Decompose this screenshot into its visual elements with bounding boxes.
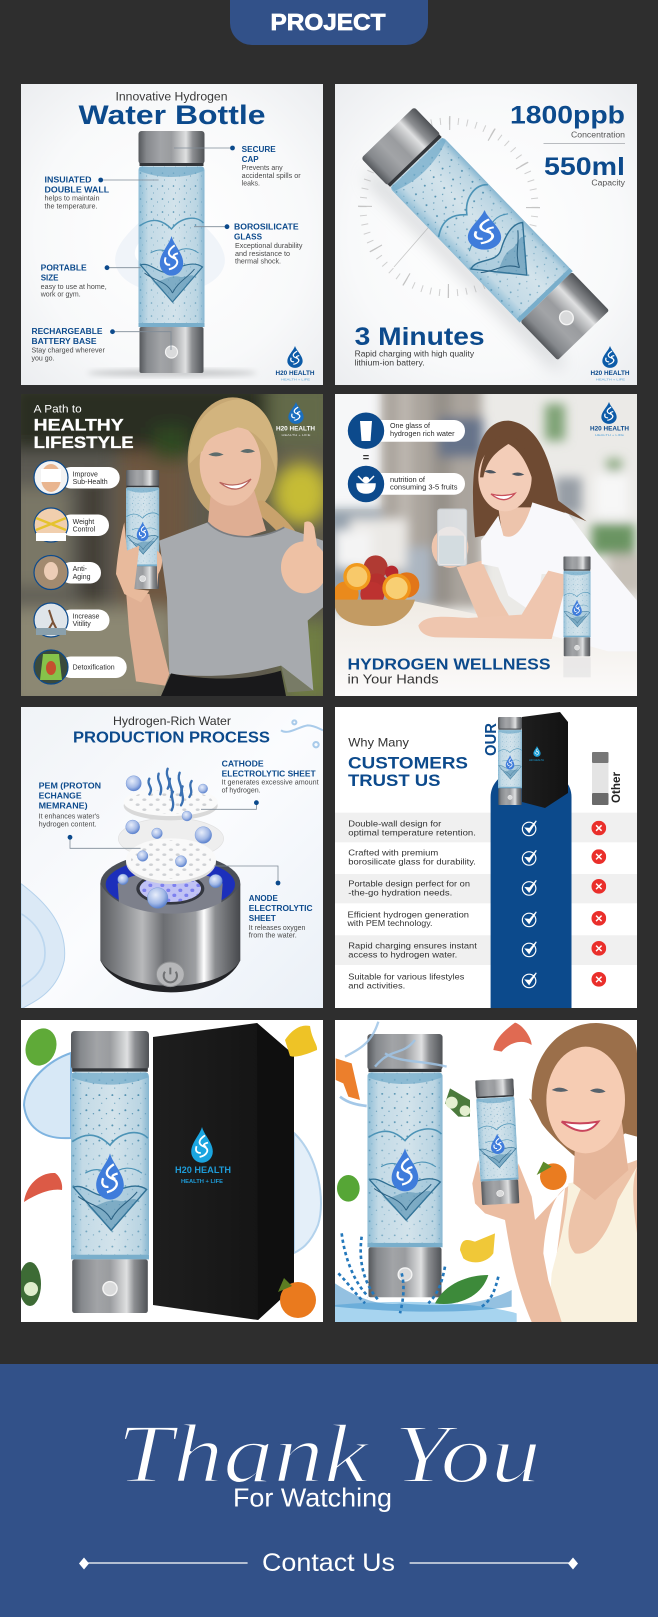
callout: portable size: easy to use at home,: [41, 284, 107, 291]
steel body: [100, 884, 240, 986]
callout: PEM: hydrogen content.: [39, 822, 97, 829]
benefit: anti-aging: Aging: [73, 574, 91, 581]
table: [335, 601, 637, 696]
benefit: improve sub-health: [34, 460, 120, 494]
banana: [285, 1026, 317, 1057]
specs: 3 minutes: 3 Minutes: [355, 323, 485, 351]
logo: H20 Health white: [276, 402, 315, 437]
pumpkin: [278, 1278, 316, 1318]
hand on bottle: [116, 522, 149, 602]
callout: borosilicate glass: [194, 222, 303, 266]
product bottle in hand: [126, 470, 159, 589]
infographic pill: fruits: nutrition of: [390, 477, 425, 484]
header tab: PROJECT: [230, 0, 428, 45]
t-shirt: [159, 522, 323, 691]
callout: portable size: [40, 264, 141, 299]
title: A Path to: [34, 404, 82, 416]
title: Innovative Hydrogen: [116, 92, 228, 104]
panel: bottle and box: [19, 1020, 323, 1322]
our product and box: [498, 712, 568, 808]
our product and box: H20 HEALTH: [529, 758, 544, 762]
blue highlight column: [491, 772, 572, 1008]
lettuce: [337, 1175, 360, 1202]
row 3: Portable design perfect for on: [348, 879, 470, 889]
apple slice: [24, 1173, 62, 1202]
callout: cathode electrolytic sheet: It generates excessive amount: [222, 780, 319, 787]
callout: PEM: [39, 781, 141, 848]
heading: in Your Hands: [348, 671, 439, 686]
title: [78, 92, 264, 124]
water splash left: [21, 884, 65, 1009]
logo: H20 Health: H20 HEALTH: [590, 370, 630, 377]
logo: H20 Health: H20 HEALTH: [276, 370, 315, 377]
heading: HYDROGEN WELLNESS: [348, 656, 550, 673]
row 1: optimal temperature retention.: [348, 828, 476, 838]
heading: TRUST US: [348, 771, 440, 790]
callout: PEM: It enhances water's: [39, 814, 100, 821]
tank top: [548, 1167, 637, 1322]
specs: 3 minutes: [355, 327, 484, 367]
callout: rechargeable battery base: [32, 327, 171, 363]
contact us: Contact Us: [262, 1549, 395, 1577]
other bottle: [592, 752, 608, 805]
benefit: anti-aging: [34, 556, 101, 590]
label: OUR: OUR: [483, 723, 500, 756]
arm: [472, 1160, 565, 1322]
callout: insulated double wall: the temperature.: [44, 203, 98, 210]
raised arm: [457, 561, 510, 618]
photo composition: [335, 1022, 637, 1322]
water splash left: [24, 1053, 71, 1138]
callout: rechargeable battery base: RECHARGEABLE: [32, 327, 103, 336]
callout: borosilicate glass: GLASS: [234, 232, 263, 242]
glass: [438, 509, 467, 566]
logo: H20 Health white: HEALTH + LIFE: [282, 433, 310, 437]
label: Other: Other: [611, 771, 623, 803]
callout: insulated double wall: INSUlATED: [44, 176, 92, 185]
specs: 1800ppb concentration: [510, 101, 625, 144]
infographic pill: one glass: hydrogen rich water: [390, 431, 455, 438]
large product bottle: [367, 1034, 443, 1297]
rotated product bottle: [361, 107, 610, 361]
infographic pill: fruits: consuming 3-5 fruits: [390, 484, 458, 492]
device exploded view: [21, 720, 323, 1009]
row 3: [348, 879, 606, 898]
row 4: [346, 909, 606, 928]
callout: cathode electrolytic sheet: [201, 759, 319, 809]
panel: customer trust comparison: [335, 707, 637, 1008]
callout: secure cap: leaks.: [242, 180, 260, 188]
heading: Why Many: [348, 736, 409, 750]
specs: 1800ppb concentration: 1800ppb: [510, 101, 625, 129]
neck: [573, 1120, 628, 1200]
row 6: Suitable for various lifestyles: [348, 972, 464, 982]
rim and glow: [100, 853, 240, 914]
callout: rechargeable battery base: you go.: [32, 356, 55, 363]
callout: PEM: MEMRANE): [39, 801, 88, 810]
header tab: PROJECT: PROJECT: [270, 9, 386, 35]
hydrogen squiggles: [149, 769, 192, 810]
fruit bowl: [333, 555, 419, 626]
face: [200, 422, 261, 506]
photo: woman holding bottle: [21, 394, 323, 696]
callout: rechargeable battery base: BATTERY BASE: [32, 337, 97, 346]
apple slice: [493, 1023, 532, 1052]
benefit: detoxification: [34, 650, 127, 684]
splash on cap: [345, 1022, 447, 1067]
title: [34, 404, 134, 452]
specs: 550ml capacity: [544, 157, 625, 187]
banana: [460, 1233, 495, 1262]
callout: portable size: SIZE: [41, 274, 59, 283]
water splash top right: [281, 720, 323, 747]
callout: portable size: work or gym.: [40, 292, 81, 299]
callout: anode electrolytic sheet: It releases oxygen: [249, 925, 306, 932]
row 1: Double-wall design for: [348, 819, 441, 829]
callout: PEM: ECHANGE: [39, 791, 82, 800]
row 1: [348, 819, 606, 838]
callout: borosilicate glass: thermal shock.: [235, 258, 281, 266]
logo: H20 Health white: H20 HEALTH: [276, 426, 315, 433]
callout: anode electrolytic sheet: ELECTROLYTIC: [249, 904, 313, 913]
raised thumb hand: [281, 521, 328, 593]
photo: woman with glass: [335, 394, 637, 696]
for watching: For Watching: [233, 1483, 392, 1513]
callout: anode electrolytic sheet: from the water.: [249, 933, 297, 940]
benefit: anti-aging: Anti-: [73, 566, 88, 573]
row 6: and activities.: [348, 981, 405, 991]
face: [478, 443, 532, 511]
faint background logo: [115, 224, 225, 287]
hydrogen bubbles: [118, 776, 222, 908]
callout: rechargeable battery base: Stay charged wherever: [32, 348, 106, 355]
white shirt: [481, 502, 637, 651]
title: Water Bottle: [78, 100, 266, 130]
contact us: [79, 1549, 578, 1577]
woman body: [548, 1160, 637, 1322]
callout: insulated double wall: DOUBLE WALL: [44, 186, 109, 195]
lettuce: [20, 1024, 62, 1070]
row 2: borosilicate glass for durability.: [348, 856, 476, 866]
benefit: improve sub-health: Sub-Health: [73, 479, 108, 486]
callout: insulated double wall: [44, 176, 159, 210]
gift box: H20 HEALTH: [175, 1165, 231, 1176]
thank you script: Thank You: [117, 1408, 541, 1501]
panel: hydrogen wellness photo: [335, 394, 637, 696]
title: HEALTHY: [34, 416, 124, 435]
product bottle: [71, 1031, 149, 1313]
callout: cathode electrolytic sheet: ELECTROLYTIC SHEET: [222, 769, 316, 778]
logo: H20 Health: [590, 402, 629, 437]
specs: 550ml capacity: Capacity: [591, 179, 625, 188]
callout: secure cap: CAP: [242, 155, 259, 164]
specs: 3 minutes: lithium-ion battery.: [355, 358, 425, 367]
water surface: [335, 1233, 517, 1322]
panel: woman with bottles: [335, 1020, 637, 1322]
panel: healthy lifestyle photo: [21, 394, 323, 696]
footer band: [0, 1364, 658, 1617]
pants: [161, 671, 286, 696]
product bottle: [138, 131, 204, 373]
gift box: [153, 1023, 294, 1320]
callout: anode electrolytic sheet: ANODE: [249, 894, 278, 903]
benefit: increase vitility: Increase: [73, 613, 100, 620]
face: [546, 1047, 625, 1153]
panel: water bottle anatomy: [21, 84, 323, 385]
product bottle: [563, 556, 591, 656]
callout: secure cap: Prevents any: [242, 165, 283, 172]
logo: H20 Health: HEALTH + LIFE: [281, 378, 310, 382]
specs: 1800ppb concentration: Concentration: [571, 130, 625, 140]
heading: CUSTOMERS: [348, 753, 468, 772]
cucumber: [19, 1262, 41, 1306]
hair: [529, 1023, 637, 1165]
row 2: [348, 848, 606, 866]
row 3: -the-go hydration needs.: [348, 888, 452, 898]
benefit: improve sub-health: Improve: [73, 472, 98, 478]
callout: cathode electrolytic sheet: CATHODE: [222, 759, 264, 768]
arm: [126, 591, 169, 686]
title: Hydrogen-Rich Water: [113, 714, 231, 728]
logo: H20 Health: [276, 346, 315, 382]
logo: H20 Health: [590, 346, 630, 382]
callout: anode electrolytic sheet: [214, 866, 313, 940]
callout: cathode electrolytic sheet: of hydrogen.: [222, 787, 261, 794]
small bottle in hand: [475, 1078, 520, 1205]
callout: secure cap: [174, 145, 301, 188]
callout: insulated double wall: helps to maintain: [44, 196, 100, 203]
logo: H20 Health: HEALTH + LIFE: [595, 433, 624, 437]
infographic pill: one glass: One glass of: [390, 423, 430, 430]
callout: PEM: PEM (PROTON: [39, 781, 101, 790]
callout: borosilicate glass: Exceptional durability: [235, 243, 303, 250]
pumpkin: [537, 1162, 567, 1190]
callout: secure cap: accidental spills or: [242, 173, 301, 180]
logo: H20 Health: H20 HEALTH: [590, 426, 629, 432]
bottle logo: [468, 210, 501, 250]
neck: [208, 491, 266, 541]
panel: production process: [21, 707, 323, 1009]
bottle shadow: [87, 370, 257, 376]
row 5: Rapid charging ensures instant: [348, 940, 477, 950]
membrane discs: [118, 818, 224, 859]
specs: 550ml capacity: 550ml: [544, 153, 625, 181]
row 5: [348, 940, 606, 959]
specs: 3 minutes: Rapid charging with high quality: [355, 350, 474, 359]
heading: [348, 656, 550, 686]
water splash right: [294, 1133, 321, 1253]
logo: H20 Health: HEALTH + LIFE: [596, 378, 625, 382]
row bands: [335, 813, 637, 965]
bottle shadow: [370, 175, 560, 365]
callout: secure cap: SECURE: [242, 145, 276, 154]
benefit: increase vitility: Vitility: [73, 621, 91, 628]
hair: [473, 421, 587, 537]
benefit: weight control: Weight: [73, 519, 94, 526]
benefit: weight control: [34, 508, 109, 542]
row 2: Crafted with premium: [348, 848, 438, 858]
heading: [348, 736, 468, 790]
gift box: HEALTH + LIFE: [181, 1179, 223, 1185]
title: [73, 714, 270, 747]
panel: specifications: [335, 84, 637, 385]
hair: [188, 397, 278, 521]
cucumber: [445, 1088, 470, 1117]
row 5: access to hydrogen water.: [348, 949, 457, 959]
base shadow ring: [100, 960, 240, 992]
callout: anode electrolytic sheet: SHEET: [249, 914, 276, 923]
benefit: detoxification: Detoxification: [73, 664, 115, 672]
power button: [156, 962, 184, 987]
infographic pill: one glass: [348, 412, 465, 449]
neck and chest: [498, 507, 532, 561]
row 6: [348, 972, 606, 991]
callout: borosilicate glass: and resistance to: [235, 251, 290, 258]
benefit: weight control: Control: [73, 527, 96, 534]
row 4: with PEM technology.: [346, 918, 432, 928]
row 4: Efficient hydrogen generation: [348, 909, 469, 919]
callout: borosilicate glass: BOROSILICATE: [234, 222, 299, 231]
forearm on table: [418, 571, 568, 639]
title: LIFESTYLE: [34, 433, 134, 452]
title: PRODUCTION PROCESS: [73, 730, 270, 747]
callout: portable size: PORTABLE: [41, 264, 87, 273]
carrot: [336, 1058, 360, 1100]
benefit: increase vitility: [34, 603, 110, 637]
equals sign: =: [363, 452, 369, 464]
dial ticks: [363, 121, 535, 293]
infographic pill: fruits: [348, 466, 465, 502]
